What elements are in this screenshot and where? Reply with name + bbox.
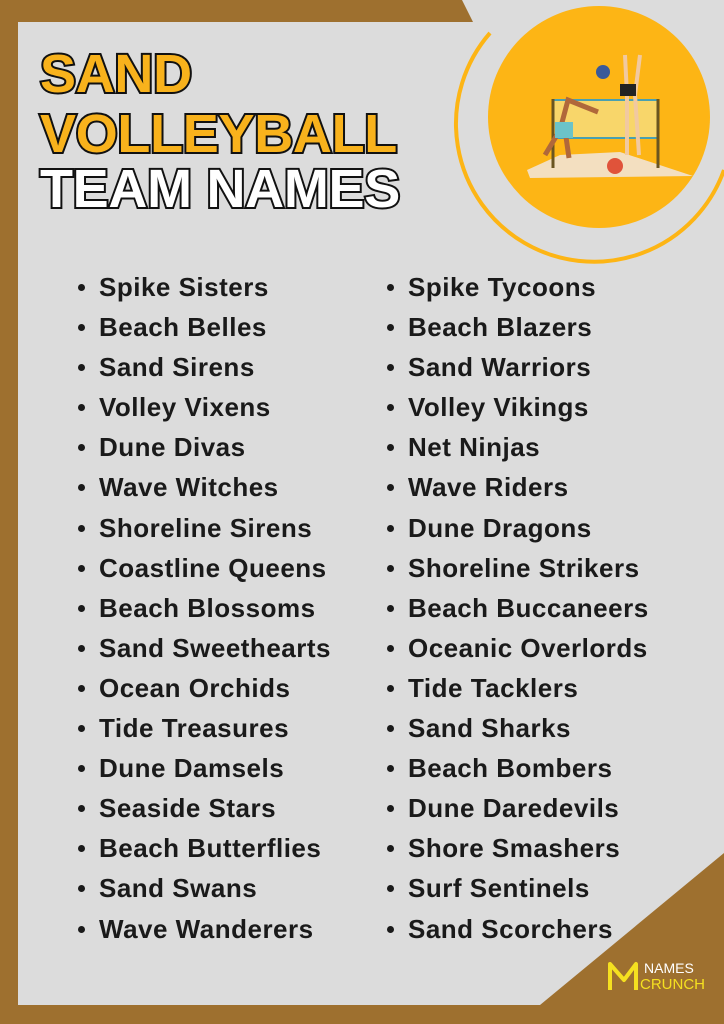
list: right column: Dune Daredevils: [408, 793, 619, 823]
list: left column: Wave Witches: [99, 472, 279, 502]
list: left column: Beach Belles: [99, 312, 267, 342]
list: left column: Beach Butterflies: [99, 833, 321, 863]
list: right column: Surf Sentinels: [408, 873, 590, 903]
list: right column: Sand Sharks: [408, 713, 571, 743]
list: left column: Dune Damsels: [99, 753, 284, 783]
text: VOLLEYBALL: [40, 104, 397, 164]
list: right column: Tide Tacklers: [408, 673, 578, 703]
title: [38, 44, 400, 219]
list: right column: Beach Bombers: [408, 753, 612, 783]
list: left column: Dune Divas: [99, 432, 246, 462]
text: TEAM NAMES: [40, 159, 400, 219]
list: left column: [78, 272, 331, 944]
list: left column: Seaside Stars: [99, 793, 276, 823]
list: left column: Ocean Orchids: [99, 673, 290, 703]
logo: CRUNCH: [640, 976, 705, 993]
list: right column: Oceanic Overlords: [408, 633, 648, 663]
list: right column: Beach Buccaneers: [408, 593, 649, 623]
list: left column: Sand Swans: [99, 873, 257, 903]
list: right column: Volley Vikings: [408, 392, 589, 422]
logo: NAMES: [644, 960, 694, 976]
list: right column: Beach Blazers: [408, 312, 592, 342]
list: right column: Spike Tycoons: [408, 272, 596, 302]
orange ring arc: [456, 33, 724, 262]
list: right column: Sand Warriors: [408, 352, 591, 382]
list: right column: Shoreline Strikers: [408, 553, 640, 583]
list: left column: Shoreline Sirens: [99, 513, 312, 543]
list: left column: Spike Sisters: [99, 272, 269, 302]
illustration circle: [488, 6, 710, 228]
list: right column: Net Ninjas: [408, 432, 540, 462]
list: right column: Sand Scorchers: [408, 914, 613, 944]
list: left column: Tide Treasures: [99, 713, 289, 743]
list: right column: Dune Dragons: [408, 513, 592, 543]
text: SAND: [40, 44, 192, 104]
logo: [608, 960, 705, 993]
list: left column: Coastline Queens: [99, 553, 327, 583]
list: left column: Sand Sirens: [99, 352, 255, 382]
list: right column: Wave Riders: [408, 472, 569, 502]
list: left column: Beach Blossoms: [99, 593, 316, 623]
list: right column: [387, 272, 649, 944]
list: right column: Shore Smashers: [408, 833, 620, 863]
list: left column: Sand Sweethearts: [99, 633, 331, 663]
list: left column: Wave Wanderers: [99, 914, 314, 944]
list: left column: Volley Vixens: [99, 392, 271, 422]
